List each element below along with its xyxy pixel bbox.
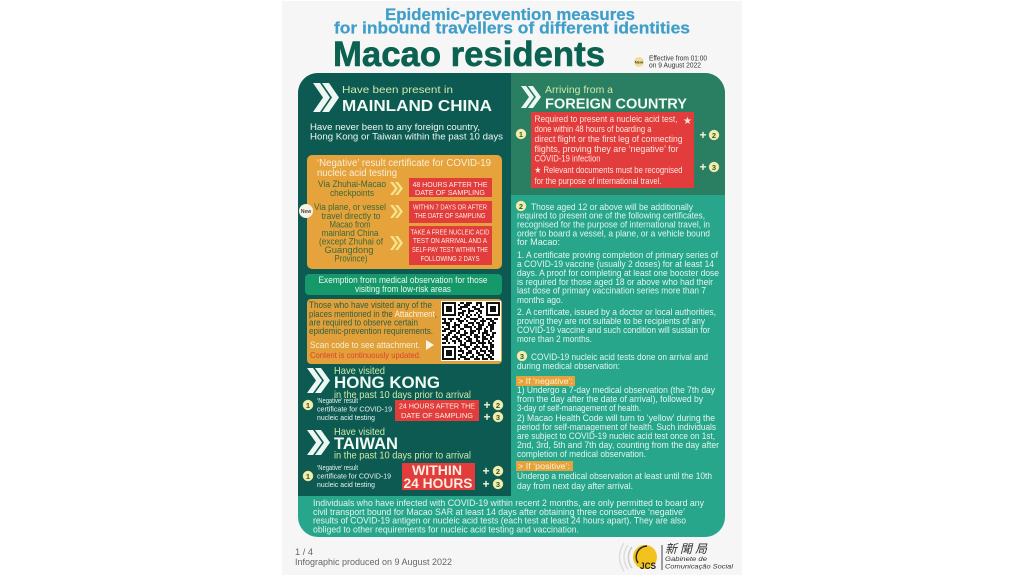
- badge 3: 3: [520, 352, 524, 361]
- text block: requirement 3: during medical observation:: [517, 361, 620, 371]
- icon: Taiwan chevrons: [307, 430, 330, 455]
- text block: requirement 3: completion of medical observation.: [517, 449, 646, 459]
- heading: mainland China: [342, 84, 492, 115]
- text block: requirement 2: Those aged 12 or above will be additionally: [531, 202, 693, 212]
- callout: nucleic acid test requirement: COVID-19 infection: [534, 154, 600, 164]
- text block: recent infection note: results of COVID-19 antigen or nucleic acid tests (each test at least 24 hours apart). They are also: [313, 516, 686, 526]
- badges: plus 2 and 3: 2: [496, 401, 500, 410]
- callout: 24 hours after sampling: [395, 400, 479, 421]
- badges: plus 2 and 3: [483, 398, 503, 424]
- section: Hong Kong: Have visited: [334, 365, 385, 377]
- logo: Gabinete de Comunicação Social: 新聞局: [665, 542, 708, 556]
- callout: nucleic acid test requirement: ★: [683, 116, 692, 127]
- text block: requirement 2: last dose of primary vaccination series more than 7: [517, 286, 706, 296]
- text block: requirement 2: a COVID-19 vaccine (usually 2 doses) for at least 14: [517, 259, 714, 269]
- footer text: [295, 547, 452, 567]
- panel: negative result certificate: ‘Negative’ result certificate for COVID-19: [317, 158, 491, 169]
- text: condition: [310, 122, 503, 142]
- text: via plane or vessel: [314, 202, 386, 264]
- heading: foreign country: [545, 84, 687, 112]
- text: Taiwan certificate: certificate for COVID-19: [317, 472, 391, 480]
- panel: attachment notice: Scan code to see attachment.: [310, 340, 420, 350]
- main card background: [298, 73, 725, 537]
- text block: requirement 2: more than 2 months.: [517, 334, 592, 344]
- badges: plus 2 and 3: +: [482, 477, 490, 491]
- title: for inbound travellers of different identities: [334, 20, 690, 38]
- text block: requirement 2: COVID-19 vaccine and such condition will sustain for: [517, 325, 710, 335]
- text block: recent infection note: Individuals who have infected with COVID-19 within recent 2 months, are only permitted to board any: [313, 498, 704, 508]
- banner: exemption: Exemption from medical observation for those: [318, 275, 488, 285]
- callout: free nucleic acid test: [409, 226, 492, 265]
- QR code: [441, 301, 501, 361]
- badges: plus 2 and 3: +: [483, 410, 491, 424]
- callout: nucleic acid test requirement: done within 48 hours of boarding a: [534, 124, 652, 134]
- callout: 24 hours after sampling: 24 HOURS AFTER THE: [399, 402, 475, 410]
- badges: plus 2 and 3: [699, 128, 719, 174]
- text: via plane or vessel: travel directly to: [322, 211, 380, 221]
- panel: negative result certificate: [299, 155, 502, 269]
- text block: requirement 3: period for self-management of health. Such individuals: [517, 422, 716, 432]
- callout: nucleic acid test requirement: for the purpose of international travel.: [534, 176, 662, 186]
- text block: recent infection note: [313, 498, 704, 534]
- badges: plus 2 and 3: 3: [712, 163, 716, 172]
- panel: attachment notice: places mentioned in the Attachment,: [309, 309, 437, 319]
- text block: requirement 2: 2. A certificate, issued by a doctor or local authorities,: [517, 307, 716, 317]
- text: via plane or vessel: Province): [334, 254, 368, 264]
- text: condition: Have never been to any foreign country,: [310, 122, 480, 132]
- section: Taiwan: [303, 426, 503, 491]
- callout: within 24 hours: WITHIN: [412, 463, 462, 478]
- text: Hong Kong certificate: [317, 396, 392, 422]
- badge 2: 2: [519, 202, 523, 211]
- badges: plus 2 and 3: [482, 464, 503, 491]
- panel: attachment notice: Content is continuously updated.: [310, 350, 421, 360]
- callout: within 7 days: [409, 201, 492, 223]
- icon: new badge: New: [301, 209, 311, 215]
- badge 1: 1: [306, 472, 310, 481]
- callout: 48 hours: 48 HOURS AFTER THE: [412, 180, 488, 189]
- text block: requirement 3: [516, 351, 719, 491]
- icon: header chevrons: [521, 86, 541, 108]
- section: Taiwan: in the past 10 days prior to arrival: [334, 450, 471, 462]
- heading: foreign country: FOREIGN COUNTRY: [545, 96, 687, 112]
- text: Taiwan certificate: nucleic acid testing: [317, 480, 375, 489]
- panel: attachment notice: Those who have visited any of the: [309, 300, 432, 310]
- text: via plane or vessel: mainland China: [322, 228, 378, 238]
- heading: mainland China: Have been present in: [342, 84, 453, 96]
- panel: foreign country: [511, 73, 725, 195]
- panel: attachment notice: epidemic-prevention requirements.: [309, 326, 433, 336]
- callout: 48 hours: [409, 178, 492, 197]
- text block: requirement 3: are subject to COVID-19 nucleic acid test once on 1st,: [517, 431, 715, 441]
- text block: requirement 2: proving they are not suitable to be recipients of any: [517, 316, 705, 326]
- callout: nucleic acid test requirement: Required to present a nucleic acid test,: [534, 114, 678, 124]
- title: Epidemic-prevention measures: [385, 6, 635, 24]
- badge 1: [516, 129, 526, 139]
- callout: nucleic acid test requirement: direct flight or the first leg of connecting: [534, 134, 682, 144]
- effective date note: Effective from 01:00: [649, 56, 707, 62]
- text: Hong Kong certificate: ‘Negative’ result: [317, 396, 358, 405]
- icon: Hong Kong chevrons: [307, 368, 330, 393]
- panel: attachment notice: [307, 299, 502, 364]
- callout: 48 hours: DATE OF SAMPLING: [415, 188, 485, 197]
- section: Hong Kong: in the past 10 days prior to arrival: [334, 389, 471, 401]
- text block: requirement 2: 1. A certificate proving completion of primary series of: [517, 250, 718, 260]
- section: Hong Kong: [303, 365, 503, 424]
- text block: requirement 3: 2) Macao Health Code will turn to ‘yellow’ during the: [517, 413, 715, 423]
- text: condition: Hong Kong or Taiwan within the past 10 days: [310, 132, 503, 142]
- logo: Gabinete de Comunicação Social: Gabinete de: [665, 556, 707, 563]
- callout: 24 hours after sampling: DATE OF SAMPLING: [401, 411, 473, 420]
- text: via Zhuhai-Macao: checkpoints: [330, 188, 374, 198]
- text: via plane or vessel: (except Zhuhai of: [319, 236, 383, 246]
- text: via plane or vessel: Guangdong: [324, 245, 374, 255]
- text block: requirement 3: day from next day after arrival.: [517, 481, 633, 491]
- text block: requirement 3: 3-day of self-management of health.: [517, 403, 641, 413]
- icon: header chevrons: [313, 83, 339, 112]
- callout: within 24 hours: [402, 463, 475, 491]
- badges: plus 2 and 3: +: [482, 464, 490, 478]
- panel: attachment notice: are required to observe certain: [309, 318, 418, 328]
- panel: mainland China: [298, 73, 511, 496]
- callout: free nucleic acid test: TAKE A FREE NUCLEIC ACID: [410, 228, 490, 236]
- section: Taiwan: TAIWAN: [334, 435, 398, 453]
- text block: recent infection note: civil transport bound for Macao SAR at least 14 days after obtaining three consecutive ‘negative’: [313, 507, 685, 517]
- title: Macao residents: [333, 35, 605, 74]
- text block: requirement 2: [516, 201, 719, 344]
- badges: plus 2 and 3: 3: [496, 480, 500, 489]
- text: via Zhuhai-Macao: Via Zhuhai-Macao: [318, 179, 386, 189]
- badges: plus 2 and 3: 2: [496, 467, 500, 476]
- text: Hong Kong certificate: certificate for COVID-19: [317, 404, 392, 414]
- text block: requirement 2: for Macao:: [517, 237, 560, 247]
- logo: Gabinete de Comunicação Social: Comunicação Social: [665, 564, 734, 570]
- badge 1: [303, 400, 313, 410]
- callout: within 7 days: WITHIN 7 DAYS OR AFTER: [413, 202, 487, 212]
- text block: requirement 2: recognised for the purpose of international travel, in: [517, 220, 710, 230]
- footer text: 1 / 4: [295, 547, 313, 557]
- text block: requirement 2: months ago.: [517, 295, 563, 305]
- callout: free nucleic acid test: TEST ON ARRIVAL AND A: [413, 236, 487, 245]
- text block: requirement 2: order to board a vessel, a plane, or a vehicle bound: [517, 228, 710, 238]
- callout: within 24 hours: 24 HOURS: [404, 476, 472, 491]
- heading: foreign country: Arriving from a: [545, 84, 613, 96]
- text: Hong Kong certificate: nucleic acid testing: [317, 413, 375, 422]
- text block: requirement 3: Undergo a medical observation at least until the 10th: [517, 471, 712, 481]
- callout: nucleic acid test requirement: flights, proving they are ‘negative’ for: [534, 144, 678, 154]
- section: Hong Kong: HONG KONG: [334, 374, 440, 392]
- label: if positive: > If ‘positive’:: [518, 461, 570, 471]
- text: Taiwan certificate: [317, 463, 391, 489]
- text block: requirement 2: required to present one of the following certificates,: [517, 210, 705, 220]
- heading: mainland China: MAINLAND CHINA: [342, 98, 492, 115]
- banner: exemption: [305, 274, 502, 295]
- logo: Gabinete de Comunicação Social: JCS: [640, 561, 656, 571]
- badges: plus 2 and 3: +: [483, 398, 491, 412]
- effective date note: on 9 August 2022: [649, 62, 701, 70]
- badge 1: 1: [306, 401, 310, 410]
- callout: nucleic acid test requirement: [531, 112, 694, 188]
- badges: plus 2 and 3: 3: [496, 413, 500, 422]
- text block: requirement 3: from the day after the date of arrival), followed by: [517, 394, 703, 404]
- text: via plane or vessel: Via plane, or vessel: [314, 202, 386, 212]
- text: Taiwan certificate: ‘Negative’ result: [317, 463, 358, 472]
- callout: free nucleic acid test: FOLLOWING 2 DAYS: [420, 254, 480, 263]
- badge 2: [516, 201, 526, 211]
- text block: requirement 2: is required for those aged 18 or above who had their: [517, 277, 713, 287]
- text block: requirement 2: days. A proof for completing at least one booster dose: [517, 268, 719, 278]
- callout: nucleic acid test requirement: ★ Relevant documents must be recognised: [534, 165, 682, 175]
- callout: free nucleic acid test: SELF-PAY TEST WITHIN THE: [412, 245, 488, 254]
- label: if negative: > If ‘negative’:: [518, 376, 573, 386]
- text block: requirement 3: COVID-19 nucleic acid tests done on arrival and: [531, 352, 708, 362]
- text block: requirement 3: 2nd, 3rd, 5th and 7th day, counting from the day after: [517, 440, 719, 450]
- text block: requirement 3: 1) Undergo a 7-day medical observation (the 7th day: [517, 385, 715, 395]
- section: Taiwan: Have visited: [334, 426, 385, 438]
- effective date note: [634, 56, 707, 70]
- title: [333, 6, 690, 74]
- badge 1: [303, 471, 313, 481]
- panel: negative result certificate: nucleic acid testing: [317, 168, 397, 179]
- badges: plus 2 and 3: +: [699, 160, 707, 174]
- icon: new badge: [299, 204, 313, 218]
- callout: within 7 days: THE DATE OF SAMPLING: [414, 211, 486, 220]
- badge 3: [517, 351, 527, 361]
- text: via plane or vessel: Macao from: [330, 220, 370, 230]
- banner: exemption: visiting from low-risk areas: [355, 284, 451, 294]
- badge 1: 1: [519, 130, 523, 139]
- text: via Zhuhai-Macao: [318, 179, 386, 198]
- effective date note: New: [635, 60, 644, 64]
- icon: chevrons: [390, 182, 403, 250]
- text block: recent infection note: obliged to other requirements for nucleic acid testing and vaccination.: [313, 524, 579, 534]
- logo: Gabinete de Comunicação Social: [619, 542, 734, 571]
- footer text: Infographic produced on 9 August 2022: [295, 557, 452, 567]
- badges: plus 2 and 3: 2: [712, 131, 716, 140]
- badges: plus 2 and 3: +: [699, 128, 707, 142]
